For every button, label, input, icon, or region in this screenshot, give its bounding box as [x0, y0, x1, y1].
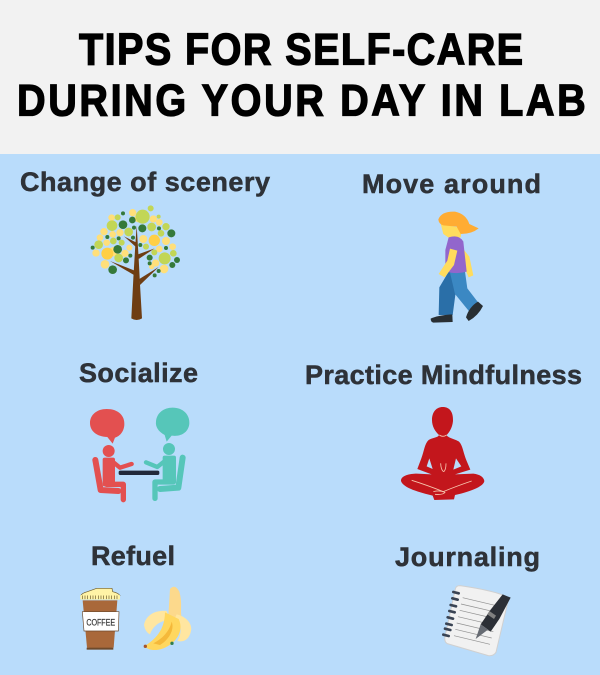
icon: notebook and pen [443, 586, 511, 656]
red speaker [90, 409, 132, 500]
heading: Socialize: Socialize [79, 358, 198, 388]
heading: Change of scenery: Change of scenery [20, 167, 270, 197]
heading: Journaling: Journaling [395, 542, 540, 572]
icon: banana [144, 587, 191, 650]
icon: walking woman [431, 212, 483, 323]
icon: two people talking [90, 408, 189, 500]
icon: coffee cup: COFFEE [86, 618, 116, 628]
teal speaker [146, 408, 189, 498]
heading: Refuel: Refuel [91, 541, 175, 571]
icon: meditating figure [401, 407, 484, 500]
heading: Practice Mindfulness: Practice Mindfulness [305, 360, 582, 390]
header band [0, 0, 600, 154]
title: DURING YOUR DAY IN LAB [17, 75, 586, 125]
heading: Move around: Move around [362, 169, 541, 199]
icon: tree [91, 205, 180, 320]
icon: coffee cup [80, 588, 120, 650]
title [17, 24, 586, 125]
title: TIPS FOR SELF-CARE [79, 24, 523, 74]
